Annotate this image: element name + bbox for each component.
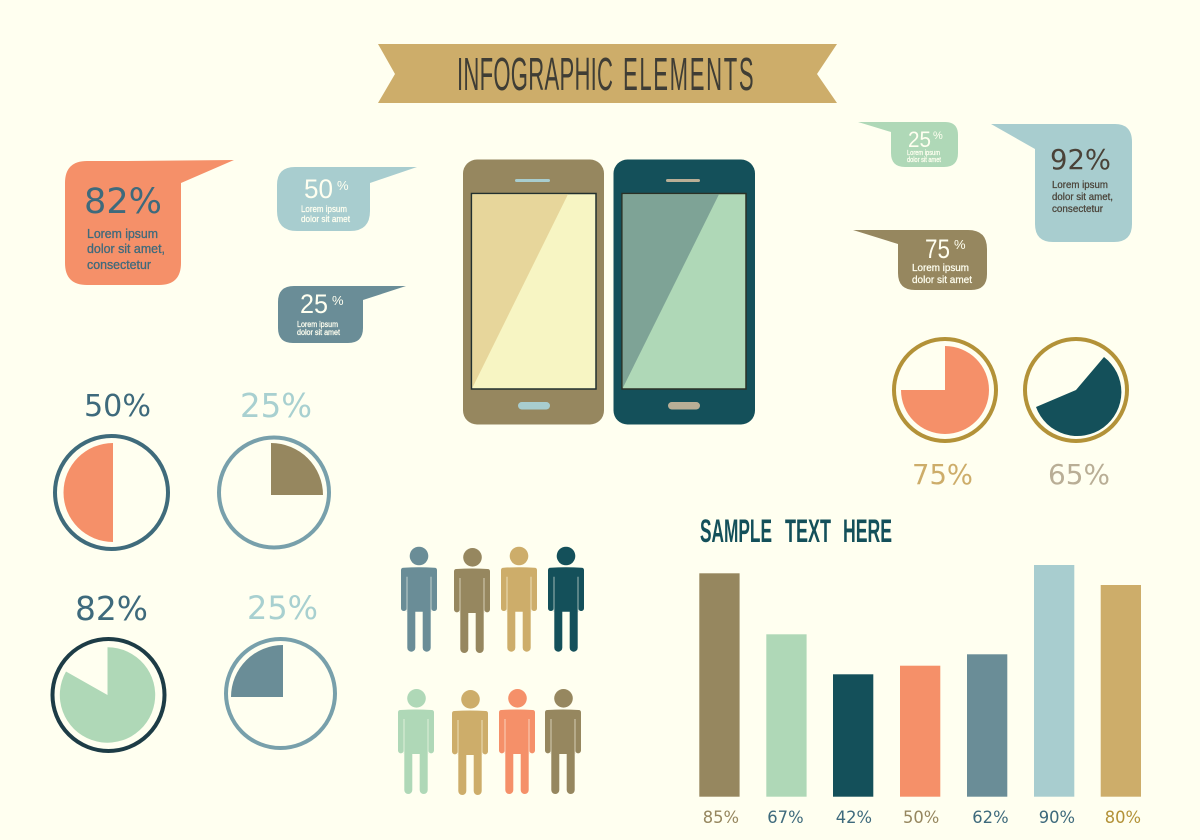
chart heading: SAMPLE: [700, 513, 772, 549]
callout: 75% taupe: Lorem ipsum: [912, 262, 969, 274]
pie chart: 25% taupe: [219, 387, 329, 548]
bar: 80%: 80%: [1105, 808, 1141, 827]
bar: 50%: 50%: [903, 808, 939, 827]
bar: 85%: 85%: [703, 808, 739, 827]
callout: 92% light blue: 92%: [1050, 144, 1111, 176]
title banner: INFOGRAPHIC: [457, 48, 613, 100]
pie chart: 25% slate: 25%: [247, 589, 318, 627]
chart heading: TEXT: [785, 513, 831, 549]
callout: 25% slate: %: [332, 293, 344, 308]
pie chart: 50%: [55, 389, 168, 549]
pie chart: 25% taupe: 25%: [240, 387, 312, 425]
callout: 25% mint: 25: [908, 127, 931, 152]
callout: 25% mint: Lorem ipsum: [907, 150, 940, 157]
pie chart: 75%: [894, 339, 996, 491]
person: tan: [452, 690, 488, 795]
title banner: ELEMENTS: [623, 48, 754, 100]
pie chart: 82%: 82%: [75, 590, 148, 628]
callout: 82% coral: consectetur: [87, 257, 152, 272]
callout: 82% coral: 82%: [84, 182, 162, 222]
phone: taupe: [463, 160, 604, 424]
bar: 80%: [1101, 585, 1141, 827]
callout: 25% mint: [858, 122, 958, 167]
callout: 75% taupe: dolor sit amet: [912, 274, 972, 286]
person icons: [398, 547, 584, 795]
bar: 67%: [766, 634, 807, 827]
person: coral: [499, 689, 535, 794]
callout: 25% slate: Lorem ipsum: [297, 319, 338, 329]
phone: dark teal: [614, 160, 755, 424]
callout: 82% coral: [65, 160, 234, 285]
title banner: [378, 44, 837, 103]
person: taupe: [454, 548, 490, 653]
callout: 50% light blue: 50: [304, 174, 333, 204]
callout: 92% light blue: dolor sit amet,: [1052, 191, 1113, 203]
person: mint: [398, 689, 434, 794]
bar: 50%: [900, 666, 940, 827]
callout: 75% taupe: [853, 230, 987, 290]
bar: 42%: [833, 674, 873, 827]
pie chart: 25% slate: [226, 589, 335, 748]
callout: 75% taupe: 75: [925, 234, 950, 264]
callout: 50% light blue: [277, 167, 417, 231]
bar: 62%: 62%: [972, 808, 1009, 827]
pie chart: 65%: [1025, 339, 1127, 491]
pie chart: 82%: [52, 590, 164, 751]
callout: 25% slate: 25: [300, 289, 328, 319]
person: dark teal: [548, 547, 584, 652]
callout: 25% slate: [278, 286, 406, 343]
callout: 50% light blue: dolor sit amet: [301, 214, 350, 225]
pie chart: 65%: 65%: [1048, 459, 1110, 491]
callout: 50% light blue: %: [337, 178, 349, 193]
callout: 25% mint: %: [933, 130, 943, 142]
person: taupe: [545, 689, 581, 794]
person: slate: [401, 547, 437, 652]
bar: 85%: [699, 573, 740, 827]
bar: 90%: 90%: [1039, 808, 1075, 827]
callout: 82% coral: Lorem ipsum: [87, 226, 158, 241]
callout: 25% mint: dolor sit amet: [907, 157, 941, 164]
pie chart: 75%: 75%: [912, 459, 973, 491]
bar: 90%: [1034, 565, 1075, 827]
bar: 62%: [967, 654, 1009, 827]
callout: 92% light blue: Lorem ipsum: [1052, 179, 1108, 191]
callout: 82% coral: dolor sit amet,: [87, 241, 165, 256]
pie chart: 50%: 50%: [84, 389, 151, 424]
bar: 42%: 42%: [836, 808, 872, 827]
callout: 92% light blue: [991, 124, 1132, 242]
callout: 75% taupe: %: [954, 237, 966, 252]
callout: 50% light blue: Lorem ipsum: [301, 204, 347, 215]
callout: 25% slate: dolor sit amet: [297, 327, 341, 337]
bar chart: [699, 513, 1141, 827]
chart heading: HERE: [843, 513, 892, 549]
bar: 67%: 67%: [767, 808, 804, 827]
person: tan: [501, 547, 537, 652]
callout: 92% light blue: consectetur: [1052, 203, 1103, 215]
